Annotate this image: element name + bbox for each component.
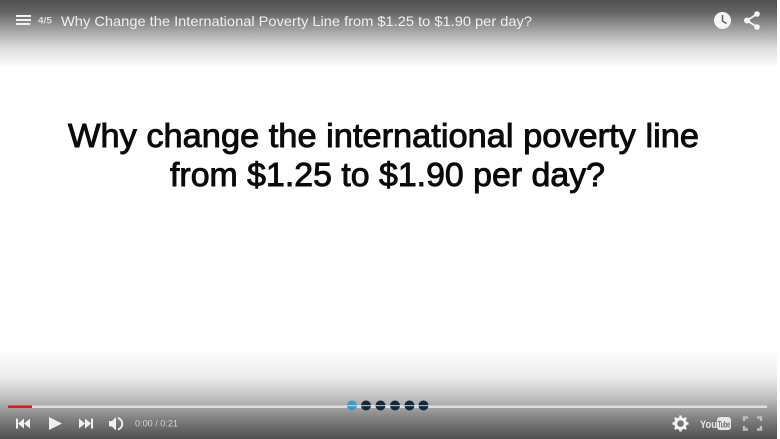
- icon: previous: [16, 418, 30, 428]
- main heading: from $1.25 to $1.90 per day?: [170, 156, 605, 193]
- video title: Why Change the International Poverty Line from $1.25 to $1.90 per day?: [61, 13, 532, 29]
- top gradient bar: [0, 0, 777, 68]
- progress bar: [8, 406, 767, 408]
- playlist dots: [345, 400, 430, 410]
- icon: settings gear: [672, 416, 688, 432]
- time display: 0:00 / 0:21: [135, 418, 178, 428]
- icon: next: [79, 418, 93, 428]
- main heading: Why change the international poverty line: [68, 117, 699, 154]
- icon: watch later clock: [714, 12, 731, 29]
- main heading: [68, 117, 699, 193]
- icon: playlist menu: [16, 15, 31, 26]
- icon: YouTube logo: You: [700, 419, 717, 431]
- bottom gradient bar: [0, 350, 777, 439]
- icon: volume: [109, 417, 122, 430]
- playlist position: 4/5: [38, 16, 52, 26]
- icon: play: [49, 417, 62, 430]
- icon: share: [744, 11, 760, 30]
- icon: YouTube logo: [700, 417, 731, 431]
- icon: YouTube logo: Tube: [718, 420, 730, 430]
- icon: fullscreen: [744, 418, 761, 430]
